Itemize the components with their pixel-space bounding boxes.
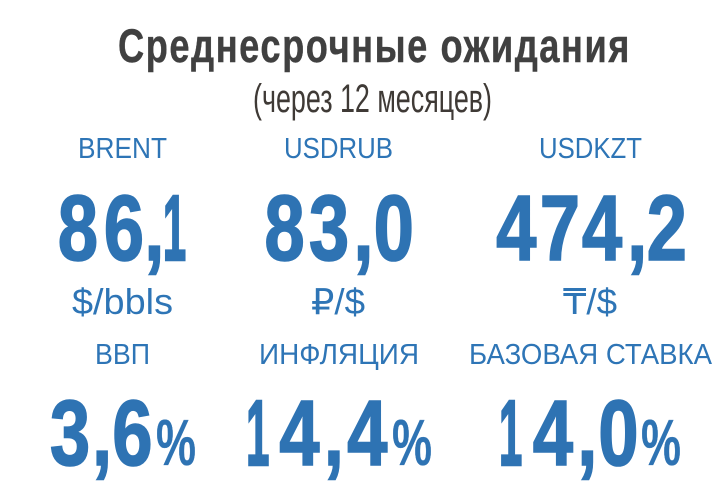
- value: USDRUB: 83,0: [264, 176, 414, 280]
- value: Brent: 86,: [58, 176, 164, 280]
- value: inflation: 4,4: [279, 381, 387, 485]
- metric: USDKZT: [496, 133, 687, 322]
- value: inflation: 1: [246, 382, 269, 486]
- metric: USDRUB: [264, 133, 414, 322]
- label: USDKZT: USDKZT: [539, 133, 642, 165]
- label: inflation: ИНФЛЯЦИЯ: [259, 339, 419, 371]
- label: Brent: BRENT: [78, 133, 167, 165]
- subtitle: (через 12 месяцев): [253, 77, 492, 121]
- value: base rate: 4,0: [533, 381, 639, 485]
- label: USDRUB: USDRUB: [284, 133, 393, 165]
- value: USDKZT: 474,2: [496, 176, 687, 280]
- metric: inflation: [246, 339, 432, 486]
- percent sign: inflation: %: [392, 406, 432, 479]
- label: GDP: ВВП: [95, 339, 150, 371]
- value: Brent: 1: [163, 177, 186, 281]
- metric: base rate: [469, 339, 713, 486]
- percent sign: GDP: %: [156, 406, 196, 479]
- percent sign: base rate: %: [641, 406, 681, 479]
- value: base rate: 1: [499, 382, 522, 486]
- value: GDP: 3,6: [50, 381, 153, 485]
- unit: USDRUB: ₽/$: [311, 281, 365, 322]
- label: base rate: БАЗОВАЯ СТАВКА: [469, 339, 713, 371]
- metric: Brent: [58, 133, 186, 322]
- unit: Brent: $/bbls: [72, 281, 173, 322]
- unit: USDKZT: ₸/$: [563, 281, 617, 322]
- metric: GDP: [50, 339, 196, 485]
